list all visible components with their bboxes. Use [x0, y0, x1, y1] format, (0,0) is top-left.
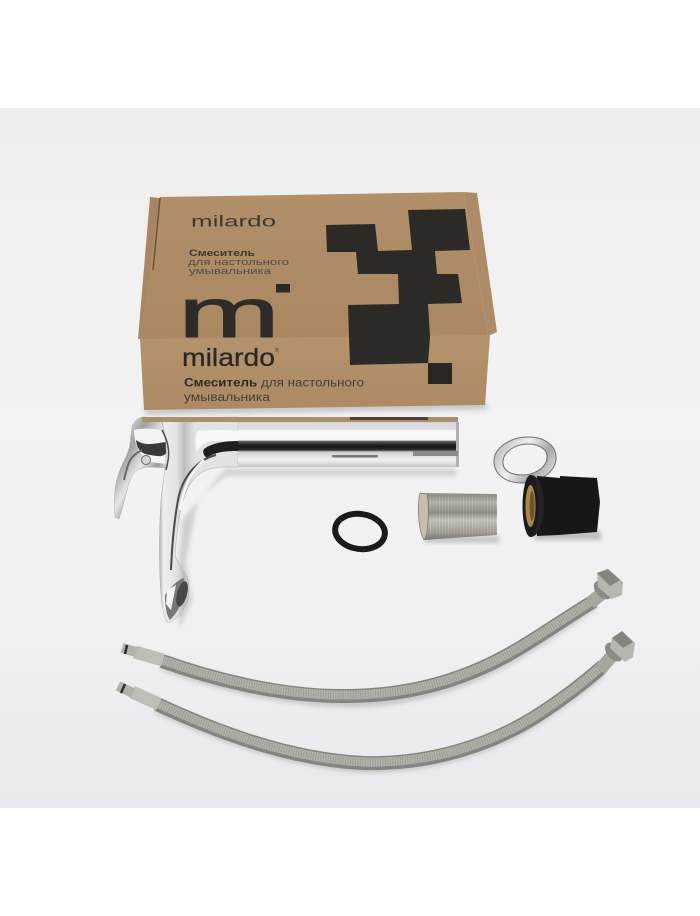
- top brand logo: milardo: [191, 214, 276, 230]
- left flap: [138, 197, 160, 339]
- brass inner: [530, 491, 534, 521]
- handle chrome head: [134, 429, 170, 464]
- nut collar: [527, 475, 544, 537]
- collar seam: [162, 430, 169, 470]
- tube end cap: [456, 422, 459, 467]
- box shadow: [144, 403, 487, 414]
- hose crimp: [132, 692, 159, 704]
- small pixel front: [428, 363, 452, 384]
- hex nut: [610, 631, 635, 662]
- front product label: Смеситель для настольного: [184, 378, 364, 390]
- nut flange: [590, 577, 616, 603]
- hose collar: [600, 652, 615, 670]
- hose braid texture: [162, 601, 594, 696]
- brass insert: [526, 485, 536, 527]
- chrome flange washer: [494, 437, 556, 483]
- hex nut top face: [612, 631, 633, 648]
- elbow bright band: [196, 430, 238, 452]
- hose collar: [590, 592, 604, 603]
- sleeve opening: [418, 493, 428, 540]
- hose braid base: [162, 601, 594, 696]
- spout tip: [165, 578, 190, 620]
- top product label: Смеситель: [189, 248, 256, 258]
- left flap crease: [153, 198, 160, 270]
- handle streaks: [124, 450, 142, 480]
- faucet body and stem: [160, 417, 238, 623]
- tube top dark reflection: [350, 417, 428, 420]
- tube top box reflection: [142, 417, 458, 422]
- photo backdrop: [0, 108, 700, 808]
- hose braid highlight: [162, 600, 594, 695]
- washer outer ring: [494, 437, 556, 483]
- chrome faucet: [114, 417, 459, 628]
- rubber gasket ring: [333, 511, 387, 552]
- top product label: для настольного: [188, 257, 289, 267]
- box front face: [140, 335, 490, 410]
- nut flange: [601, 639, 627, 665]
- faucet handle: [114, 417, 168, 519]
- product box: [138, 192, 497, 414]
- top product label: [188, 248, 289, 276]
- hose braid texture: [157, 666, 603, 763]
- tip highlight: [166, 585, 176, 610]
- hose fitting: [118, 686, 133, 693]
- nut shadow: [535, 531, 601, 540]
- hose fitting: [122, 648, 136, 652]
- box top face: [140, 192, 488, 340]
- threaded sleeve: [418, 493, 499, 543]
- top product label: умывальника: [189, 266, 271, 276]
- big m logo: m: [178, 274, 280, 352]
- elbow second streak: [180, 460, 204, 510]
- tube slot: [332, 455, 378, 458]
- hose o-ring: [121, 684, 125, 693]
- nut face: [522, 475, 538, 537]
- hex nut top face: [597, 569, 620, 586]
- front brand logo: milardo: [182, 344, 275, 372]
- hose shadow: [157, 671, 601, 766]
- sleeve shadow: [425, 536, 499, 543]
- hose crimp: [135, 652, 163, 660]
- black plastic nut: [522, 475, 601, 540]
- braided hose 2: [118, 631, 635, 766]
- pixel pattern: [326, 209, 470, 365]
- handle pin: [142, 456, 150, 464]
- tip chrome: [165, 578, 185, 620]
- faucet shadow: [176, 469, 456, 628]
- front product label line 2: умывальника: [184, 392, 271, 404]
- hose shadow: [162, 603, 594, 701]
- elbow dark band: [203, 441, 238, 458]
- hose braid base: [157, 666, 603, 763]
- hex nut: [597, 569, 623, 599]
- braided hose 1: [122, 569, 623, 701]
- faucet horizontal tube: [238, 417, 458, 467]
- small pixel top: [276, 284, 290, 292]
- hose braid highlight: [157, 665, 603, 762]
- handle dark reflection: [136, 440, 168, 456]
- right flap: [464, 192, 497, 336]
- registered mark: ®: [275, 347, 279, 354]
- elbow streak: [171, 455, 216, 570]
- tube seam detail: [413, 451, 458, 456]
- sleeve threads: [429, 495, 495, 539]
- aerator: [174, 580, 190, 608]
- hose o-ring: [125, 645, 127, 654]
- nut body: [537, 476, 600, 536]
- sleeve body: [420, 493, 497, 540]
